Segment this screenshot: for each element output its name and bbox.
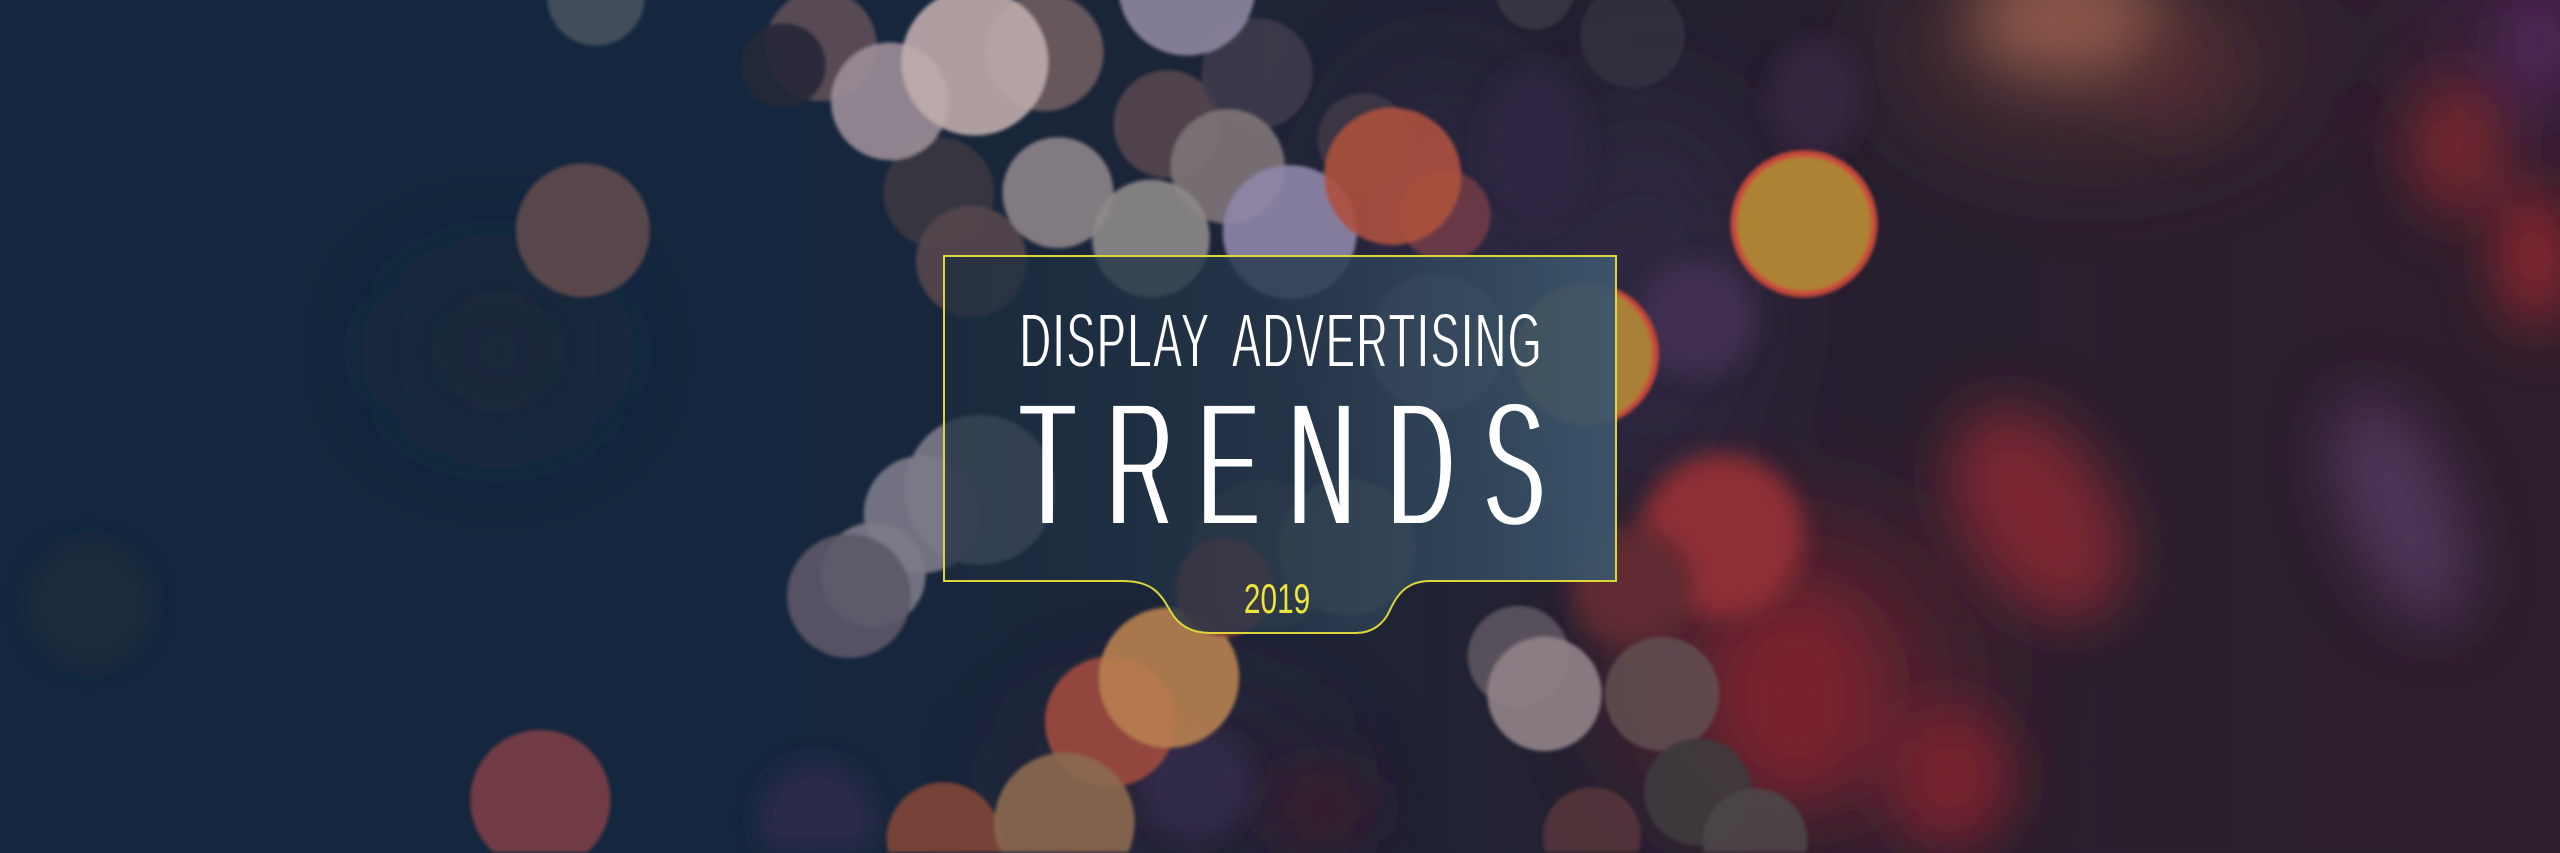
heading: display advertising: ADVERTISING [1232, 299, 1543, 384]
heading: display advertising [1020, 299, 1543, 384]
heading: trends: TRENDS [1019, 365, 1545, 565]
panel frame [944, 256, 1616, 633]
year label: 2019 [1244, 575, 1310, 622]
heading: display advertising: DISPLAY [1020, 299, 1211, 384]
